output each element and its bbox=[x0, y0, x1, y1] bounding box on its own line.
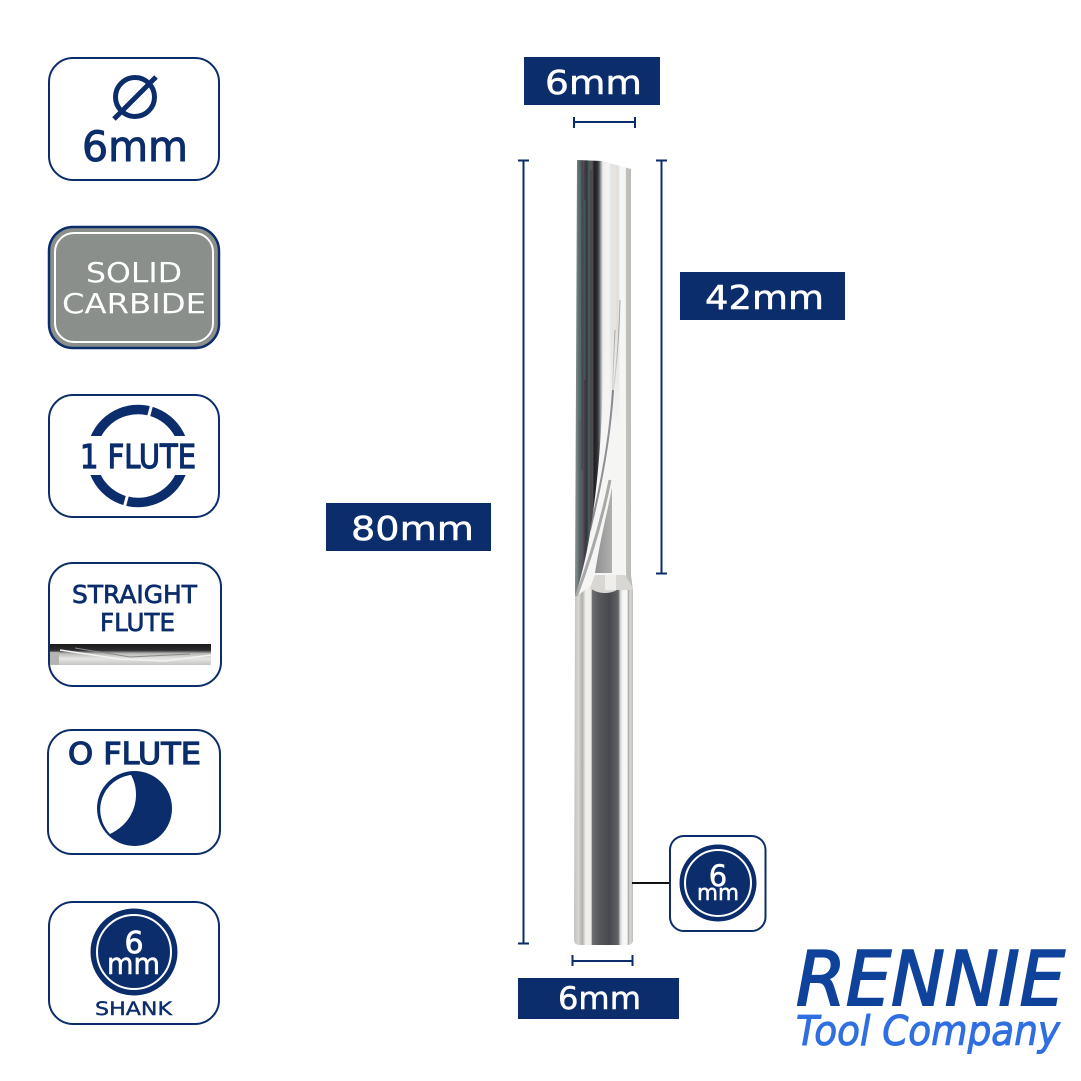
badge: 6mm shank: 6 bbox=[709, 859, 727, 893]
text: 6mm: 6mm bbox=[82, 122, 188, 171]
logo: tool company: Tool Company bbox=[796, 1007, 1061, 1055]
label: bottom 6mm: 6mm bbox=[558, 981, 641, 1017]
tool: router bit bbox=[574, 160, 633, 945]
text: shank 6: 6 bbox=[124, 926, 144, 961]
card: shank bbox=[49, 902, 219, 1024]
image: straight flute bit bbox=[50, 644, 211, 665]
card: straight flute bbox=[49, 563, 221, 686]
badge: 6mm shank bbox=[670, 836, 766, 931]
leader line bbox=[632, 882, 672, 884]
icon: flute ring bbox=[80, 400, 196, 512]
dimension: top width bbox=[574, 117, 635, 128]
label: top 6mm: 6mm bbox=[545, 63, 642, 102]
label: bottom 6mm bbox=[518, 978, 679, 1019]
text: straight: STRAIGHT bbox=[72, 580, 198, 609]
card: 1 flute bbox=[49, 395, 219, 517]
text: flute: FLUTE bbox=[100, 608, 175, 637]
dimension: flute length bbox=[656, 160, 667, 574]
logo: Rennie Tool Company bbox=[796, 935, 1066, 1055]
icon: crescent bbox=[97, 771, 172, 846]
label: 42mm bbox=[680, 272, 845, 320]
logo: rennie: RENNIE bbox=[796, 935, 1066, 1023]
dimension: bottom width bbox=[572, 955, 632, 966]
label: 42mm: 42mm bbox=[705, 278, 824, 317]
label: top 6mm bbox=[524, 57, 660, 105]
icon: shank circle bbox=[90, 908, 178, 996]
text: 1 flute: 1 FLUTE bbox=[80, 437, 196, 476]
text: shank mm: mm bbox=[107, 947, 160, 981]
icon: diameter symbol bbox=[114, 77, 156, 119]
card: 6mm diameter bbox=[49, 58, 219, 180]
label: 80mm bbox=[326, 503, 491, 551]
text: O flute: O FLUTE bbox=[68, 737, 201, 772]
text: carbide: CARBIDE bbox=[62, 288, 206, 320]
text: solid: SOLID bbox=[86, 257, 182, 289]
card: solid carbide bbox=[49, 227, 219, 348]
dimension: overall length bbox=[518, 160, 529, 944]
badge: 6mm shank: mm bbox=[697, 881, 739, 906]
label: 80mm: 80mm bbox=[351, 509, 474, 548]
text: shank: SHANK bbox=[95, 998, 173, 1020]
card: O flute bbox=[48, 730, 220, 854]
